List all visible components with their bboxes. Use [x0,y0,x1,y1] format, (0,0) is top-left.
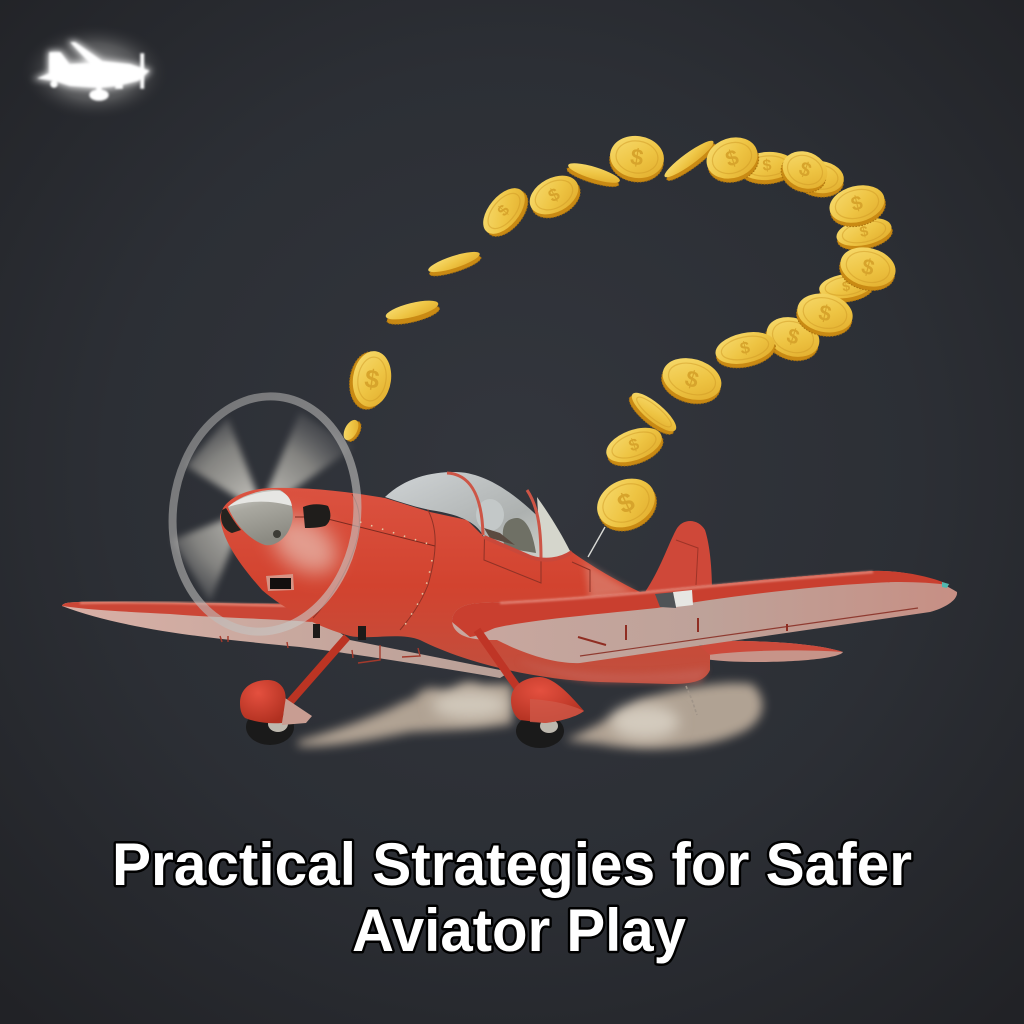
coin 6 [523,168,587,226]
coin 14: $ [858,223,870,241]
cockpit door panel [484,515,590,592]
rear fuselage pale highlight [575,556,636,600]
wing stripe patch [655,590,693,608]
wing hinge line [580,608,918,656]
coin 6: $ [545,184,563,206]
seat [503,518,536,553]
horizontal stabilizer [677,641,843,662]
coin 3 [384,297,441,328]
coin 14 [834,213,895,254]
propeller blades [172,412,354,602]
rear chain [686,686,697,715]
coin 20: $ [738,338,752,358]
highlight on nose [262,505,348,585]
canopy [385,472,572,560]
coin 8 [607,132,667,186]
left landing gear [240,637,347,745]
title: Practical Strategies for Safer [112,831,912,898]
wing tip light [942,582,949,588]
vertical tail fin [645,521,712,592]
coin 21 [657,352,726,410]
coin 15 [825,180,889,232]
title [112,831,912,964]
coin 18 [760,311,825,367]
coin 24 [589,469,665,540]
near-side left wing [62,602,510,678]
coin 18: $ [784,324,802,350]
chrome spinner [228,490,293,545]
red airplane [62,386,957,748]
coin 19: $ [816,299,834,327]
coin 21: $ [682,365,702,393]
coin 11: $ [722,144,742,172]
coin 1 [341,417,364,444]
coin 17 [835,242,900,296]
pilot helmet [476,499,515,545]
coin 5: $ [495,202,513,220]
under-nose vents [313,624,366,640]
windshield [537,497,570,557]
coin 16: $ [841,278,851,294]
coin tether line [588,527,605,557]
coin 20 [713,327,778,373]
fuselage [220,488,710,684]
belly shade [520,660,708,682]
coin 23 [602,421,668,473]
canopy frames [447,473,541,558]
coin 13 [775,145,833,199]
cowling panel seams [313,494,435,630]
propeller ring [159,386,371,642]
coin 22 [624,387,681,440]
coin 11 [701,131,764,189]
coin 9 [661,137,719,185]
coin 13: $ [796,158,814,182]
coin 5 [475,181,536,244]
coin 15: $ [849,192,865,216]
rivet line [295,517,435,546]
coin 12 [793,158,846,200]
coin 17: $ [859,253,877,281]
title: Aviator Play [352,897,687,964]
coin 24: $ [613,486,639,520]
coin 4 [426,248,483,280]
smoke trail [298,682,762,749]
icon: glowing white plane logo [21,24,169,120]
right landing gear [477,630,584,748]
coin 23: $ [626,434,642,456]
coin 2 [346,348,395,412]
coin 7 [565,159,622,190]
coin 8: $ [629,143,645,171]
coin 10: $ [762,157,772,175]
coin trail [341,131,900,557]
nose air intake [221,504,330,591]
coin 10 [739,150,795,186]
coin 2: $ [363,363,382,395]
coin 16 [818,270,875,306]
coin 19 [793,289,856,341]
right wing [452,571,957,663]
